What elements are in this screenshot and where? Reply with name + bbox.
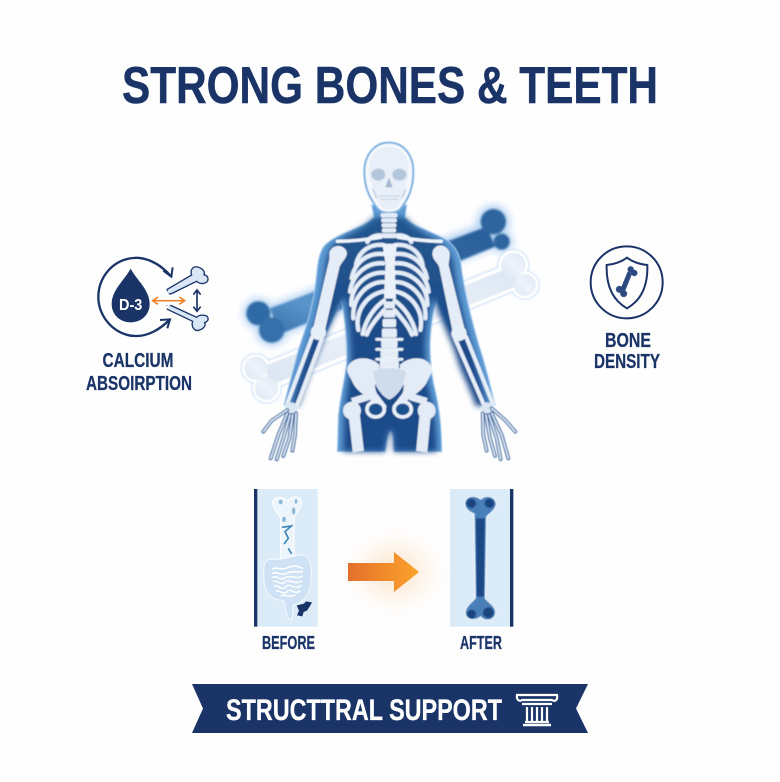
label: bone density: BONE	[605, 330, 651, 352]
label: bone density	[594, 330, 660, 373]
D-3 drop: D-3	[119, 297, 142, 314]
icon: column	[517, 695, 557, 725]
ribs right side	[394, 235, 429, 335]
background bone: pale	[241, 249, 540, 404]
strong bone	[464, 496, 497, 621]
panel: before	[254, 489, 318, 627]
skeleton figure with background bones	[241, 143, 540, 459]
pelvis	[348, 359, 432, 417]
circular arrows	[98, 258, 173, 336]
left hand	[263, 410, 296, 459]
label: after: AFTER	[460, 633, 502, 653]
lower bone	[165, 304, 208, 330]
weak bone	[273, 497, 302, 560]
orange double arrow	[153, 297, 185, 304]
banner	[192, 684, 588, 733]
skull	[368, 146, 409, 211]
calcium absorption icon	[98, 258, 208, 336]
bone density icon	[591, 246, 663, 318]
title: STRONG BONES & TEETH	[122, 57, 658, 115]
femurs	[343, 397, 436, 452]
head outline	[364, 143, 413, 213]
spine	[375, 213, 403, 369]
label: calcium absorption: CALCIUM	[102, 350, 174, 372]
upper bone	[165, 267, 208, 297]
left arm bones	[263, 246, 347, 459]
rib cage	[350, 235, 429, 335]
panel: after	[450, 489, 513, 627]
vertical double arrow	[193, 290, 201, 311]
bone	[616, 266, 637, 297]
dark spot	[297, 601, 312, 616]
label: before: BEFORE	[262, 633, 315, 653]
right arm bones	[433, 246, 515, 459]
shield	[607, 258, 647, 308]
intestines	[264, 555, 311, 620]
label: bone density: DENSITY	[594, 351, 660, 373]
arrow	[333, 520, 457, 624]
sternum	[383, 244, 397, 298]
clavicles	[337, 237, 441, 241]
background bone: dark blue	[243, 205, 513, 346]
right hand	[483, 408, 515, 459]
label: calcium absorption: ABSOIRPTION	[86, 373, 192, 395]
label: calcium absorption	[86, 350, 192, 395]
body silhouette	[284, 205, 495, 452]
banner text: STRUCTTRAL SUPPORT	[226, 694, 502, 727]
ribs left side	[350, 235, 385, 335]
